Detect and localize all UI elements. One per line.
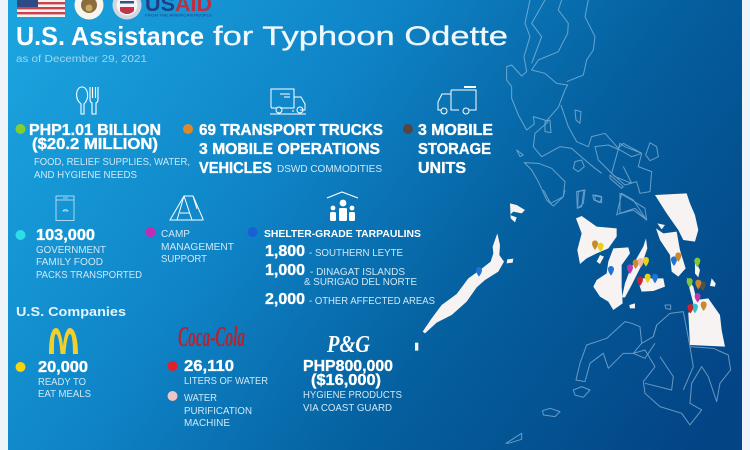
island: Cebu bbox=[622, 238, 647, 297]
logo: USAID wordmark bbox=[145, 0, 212, 18]
island: Cuyo bbox=[415, 343, 418, 351]
island: Bohol bbox=[639, 278, 665, 292]
block: shelter-grade tarpaulins: 1,800 bbox=[265, 243, 305, 260]
block: hygiene products bbox=[303, 358, 402, 414]
logo: embassy seal bbox=[74, 0, 104, 20]
island: Leyte bbox=[656, 228, 686, 277]
block: mobile storage: UNITS bbox=[418, 160, 466, 177]
block: shelter-grade tarpaulins: 1,000 bbox=[265, 262, 305, 279]
icon: shelter with people bbox=[327, 192, 358, 221]
block: hygiene products: VIA COAST GUARD bbox=[303, 402, 392, 414]
block: hygiene products: HYGIENE PRODUCTS bbox=[303, 389, 402, 401]
block: shelter-grade tarpaulins: & SURIGAO DEL NORTE bbox=[304, 276, 417, 288]
date: as of December 29, 2021 bbox=[16, 53, 147, 65]
island: Busuanga bbox=[510, 203, 525, 222]
icon: transport truck bbox=[270, 89, 306, 114]
block: liters of water: WATER bbox=[184, 392, 217, 404]
island: Dinagat bbox=[695, 260, 700, 277]
heading: U.S. Companies: U.S. Companies bbox=[16, 304, 126, 319]
title: U.S. Assistance bbox=[16, 21, 204, 51]
block: mobile storage bbox=[403, 122, 493, 177]
block: transport trucks: 3 MOBILE OPERATIONS bbox=[199, 141, 380, 158]
block: liters of water: LITERS OF WATER bbox=[184, 375, 268, 387]
logo: P&G: P&G bbox=[326, 332, 371, 358]
logo: Coca-Cola: Coca-Cola bbox=[178, 321, 245, 353]
block: family food packs: GOVERNMENT bbox=[36, 244, 107, 256]
block: PHP1.01 billion: AND HYGIENE NEEDS bbox=[34, 169, 137, 181]
block: transport trucks: VEHICLES bbox=[199, 160, 272, 177]
block: PHP1.01 billion: PHP1.01 BILLION bbox=[29, 122, 161, 139]
logo: USAID wordmark: FROM THE AMERICAN PEOPLE bbox=[145, 12, 212, 18]
icon: storage truck bbox=[438, 87, 476, 114]
logo: USAID seal bbox=[112, 0, 142, 20]
island: Surigao bbox=[687, 277, 725, 347]
block: camp management: MANAGEMENT bbox=[161, 241, 235, 253]
block: family food packs bbox=[16, 227, 142, 281]
block: mobile storage: STORAGE bbox=[418, 141, 491, 158]
block: camp management: CAMP bbox=[161, 228, 190, 240]
map: outlined regions bbox=[506, 0, 731, 443]
map: location pins bbox=[476, 240, 707, 314]
icon: spoon and fork bbox=[77, 87, 98, 114]
map: Luzon outline bbox=[507, 0, 658, 220]
block: ready to eat meals bbox=[16, 359, 91, 400]
block: liters of water: MACHINE bbox=[184, 417, 230, 429]
block: liters of water bbox=[168, 358, 268, 429]
block: shelter-grade tarpaulins bbox=[248, 227, 435, 308]
block: PHP1.01 billion: ($20.2 MILLION) bbox=[32, 136, 158, 153]
block: liters of water: PURIFICATION bbox=[184, 405, 252, 417]
island: Biliran bbox=[657, 223, 665, 229]
island: Guimaras bbox=[597, 255, 604, 264]
island: Palawan bbox=[423, 233, 504, 333]
title bbox=[16, 21, 508, 51]
block: shelter-grade tarpaulins: 2,000 bbox=[265, 291, 305, 308]
block: family food packs: PACKS TRANSPORTED bbox=[36, 269, 142, 281]
title: for Typhoon Odette bbox=[213, 21, 508, 51]
map: Mindanao and Sulu outline bbox=[506, 190, 731, 443]
block: camp management: SUPPORT bbox=[161, 253, 208, 265]
block: hygiene products: PHP800,000 bbox=[303, 358, 393, 375]
block: transport trucks bbox=[183, 122, 383, 177]
block: hygiene products: ($16,000) bbox=[311, 372, 381, 389]
block: PHP1.01 billion bbox=[16, 122, 190, 181]
block: liters of water: 26,110 bbox=[184, 358, 234, 375]
block: camp management bbox=[146, 227, 235, 265]
logo: McDonald's arches bbox=[49, 328, 78, 354]
island: Samar bbox=[655, 193, 698, 242]
island: Panay bbox=[576, 216, 617, 264]
block: ready to eat meals: EAT MEALS bbox=[38, 388, 91, 400]
block: family food packs: FAMILY FOOD bbox=[36, 256, 103, 268]
block: shelter-grade tarpaulins: - SOUTHERN LEYTE bbox=[309, 247, 403, 259]
icon: tent bbox=[170, 196, 203, 220]
island: Siquijor bbox=[629, 303, 635, 308]
block: ready to eat meals: 20,000 bbox=[38, 359, 88, 376]
island: Siargao bbox=[710, 278, 716, 287]
block: shelter-grade tarpaulins: SHELTER-GRADE TARPAULINS bbox=[264, 228, 421, 240]
island: Balabac bbox=[507, 259, 513, 263]
block: transport trucks: 69 TRANSPORT TRUCKS bbox=[199, 122, 383, 139]
block: shelter-grade tarpaulins: - OTHER AFFECTED AREAS bbox=[309, 295, 435, 307]
block: ready to eat meals: READY TO bbox=[38, 376, 86, 388]
icon: food pack bbox=[56, 196, 74, 220]
map: highlighted islands bbox=[415, 193, 725, 351]
block: shelter-grade tarpaulins: - DINAGAT ISLANDS bbox=[310, 266, 405, 278]
block: transport trucks: DSWD COMMODITIES bbox=[277, 163, 382, 175]
island: Negros bbox=[593, 247, 630, 310]
logo: US flag bbox=[17, 0, 65, 17]
block: family food packs: 103,000 bbox=[36, 227, 95, 244]
block: mobile storage: 3 MOBILE bbox=[418, 122, 493, 139]
block: PHP1.01 billion: FOOD, RELIEF SUPPLIES, WATER, bbox=[34, 156, 190, 168]
